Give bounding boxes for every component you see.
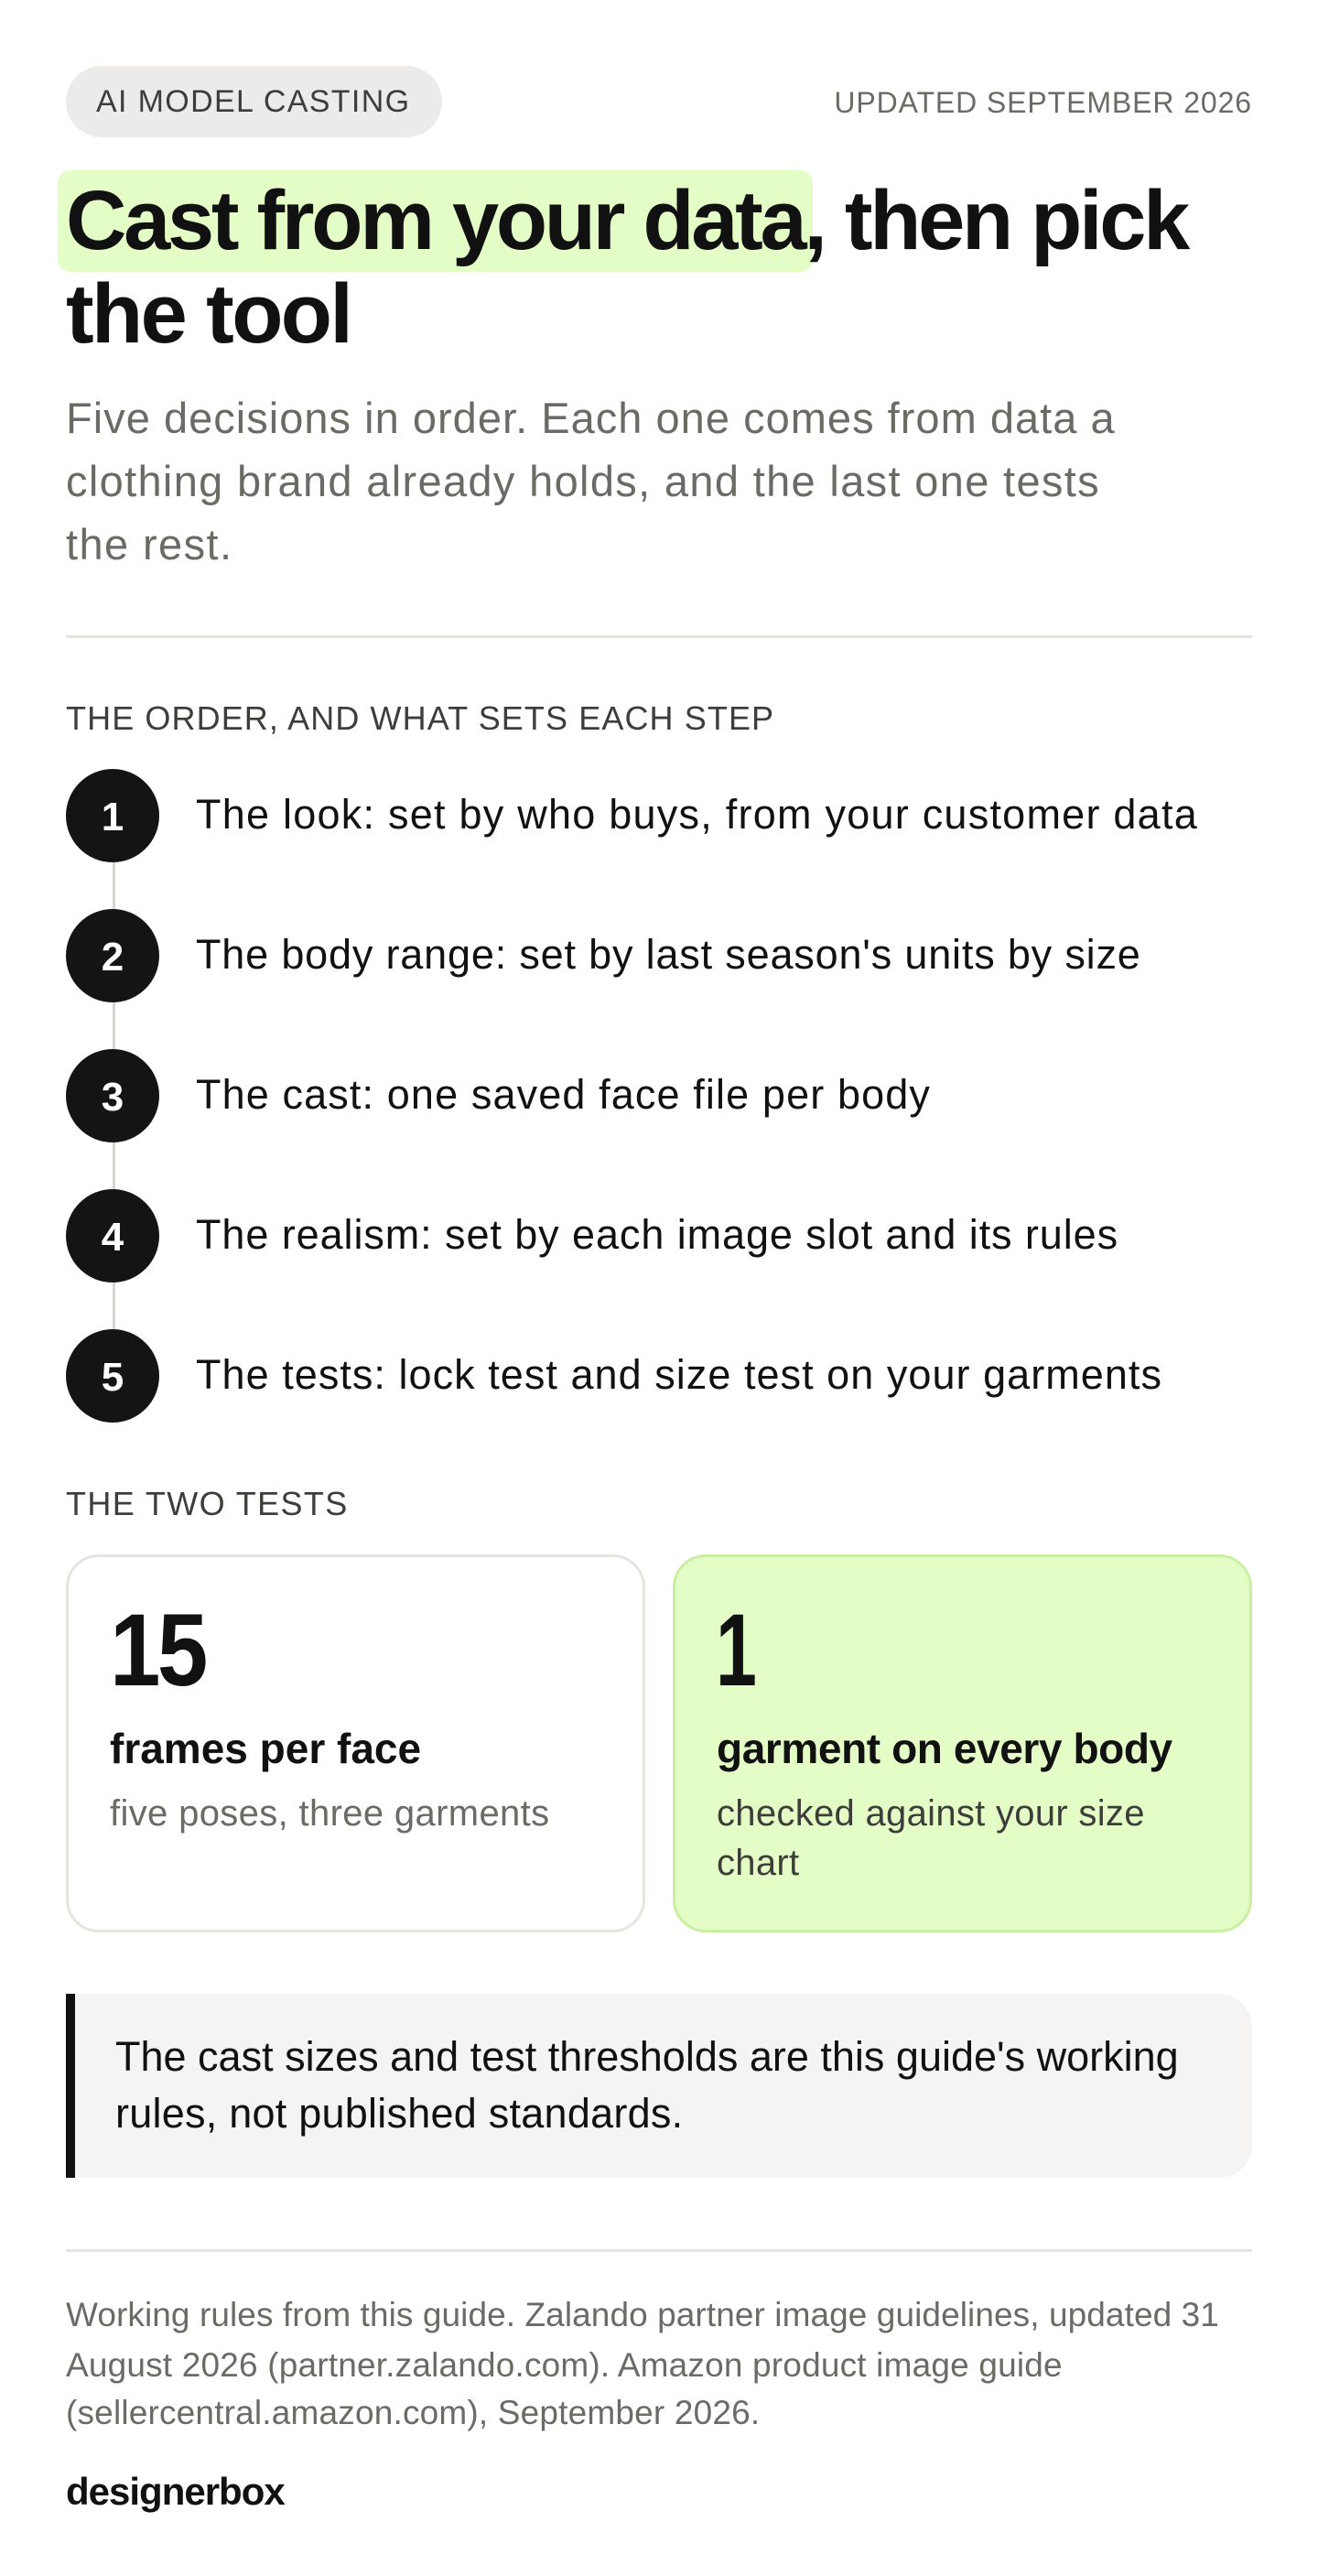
stat 1: 1 [716,1593,757,1707]
step 1 number [66,769,159,862]
step 3 number: 3 [102,1075,124,1120]
category pill [66,66,442,137]
step 3 number [66,1049,159,1142]
footer sources: August 2026 (partner.zalando.com). Amazon product image guide [66,2346,1063,2384]
title highlight [58,170,813,272]
step 4 number [66,1189,159,1283]
section heading: tests: THE TWO TESTS [66,1485,349,1522]
title [58,170,1190,361]
card: frames per face [66,1554,645,1932]
subtitle: Five decisions in order. Each one comes from data a [66,394,1116,442]
step 1 number: 1 [102,795,124,839]
category pill: AI MODEL CASTING [96,84,410,119]
footer sources [66,2296,1219,2431]
step 5 number: 5 [102,1355,124,1400]
subtitle: the rest. [66,520,232,568]
subtitle [66,394,1116,568]
stat label: garment on every body [717,1725,1172,1772]
title line 2: the tool [66,267,351,361]
step 2 number: 2 [102,935,124,980]
step 4 text: The realism: set by each image slot and its rules [196,1211,1118,1258]
stat 15: 15 [110,1593,205,1707]
stat note [717,1793,1145,1883]
stat note: five poses, three garments [110,1793,549,1834]
updated date: UPDATED SEPTEMBER 2026 [834,86,1252,119]
section heading: order: THE ORDER, AND WHAT SETS EACH STEP [66,699,774,737]
step 2 text: The body range: set by last season's units by size [196,931,1141,978]
step 5 number [66,1329,159,1423]
title line 1: Cast from your data, then pick [66,174,1187,267]
card: garment on every body [673,1554,1252,1932]
footer sources: (sellercentral.amazon.com), September 2026. [66,2394,760,2431]
stat label: frames per face [110,1725,421,1772]
callout: The cast sizes and test thresholds are this guide's working [115,2033,1179,2080]
step 3 text: The cast: one saved face file per body [196,1071,931,1118]
step 4 number: 4 [102,1215,124,1260]
connector lines [113,862,115,1329]
step 5 text: The tests: lock test and size test on your garments [196,1351,1162,1398]
subtitle: clothing brand already holds, and the last one tests [66,457,1100,505]
footer sources: Working rules from this guide. Zalando partner image guidelines, updated 31 [66,2296,1219,2333]
step 1 text: The look: set by who buys, from your customer data [196,791,1198,838]
callout [66,1994,1252,2178]
step 2 number [66,909,159,1002]
stat note: chart [717,1843,799,1883]
brand: designerbox [66,2470,285,2513]
callout: rules, not published standards. [115,2090,683,2137]
stat note: checked against your size [717,1793,1145,1834]
